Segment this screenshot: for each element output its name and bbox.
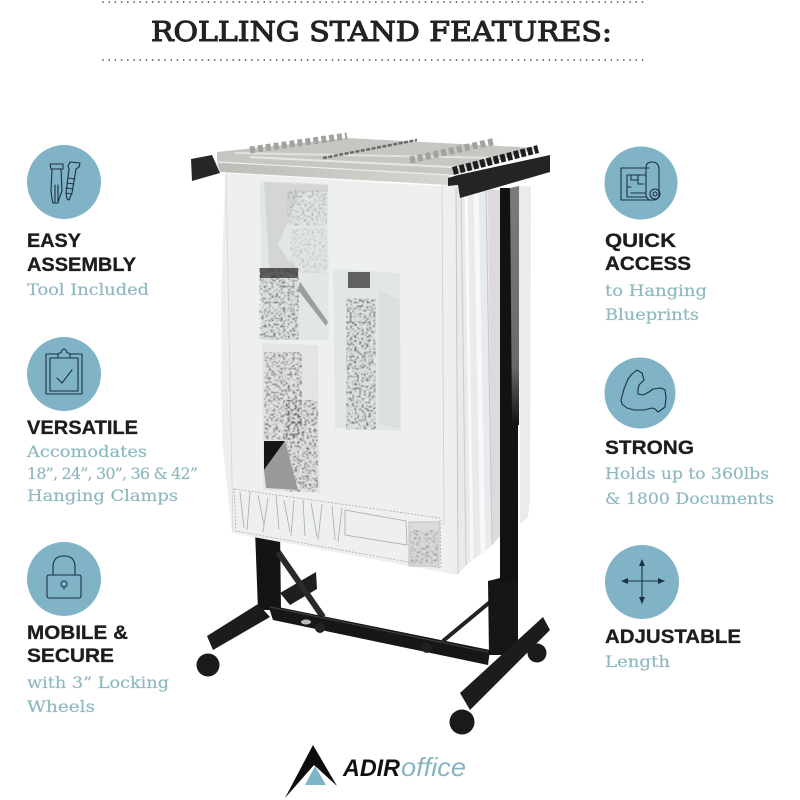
description: 18”, 24”, 30”, 36 & 42” [27,464,198,483]
blueprint drawing 3 [262,343,320,493]
logo: ADIRoffice [285,745,466,798]
back sheets and pole [442,185,531,582]
description [26,443,198,505]
heading: ACCESS [605,253,691,275]
stand base [196,530,550,734]
heading: SECURE [27,645,114,667]
heading: VERSATILE [27,417,138,439]
description: to Hanging [605,282,707,300]
blueprint drawing 2 [333,269,401,431]
icon: blueprint roll [604,146,678,220]
feature: mobile and secure [27,542,169,716]
icon: four-way arrows [605,545,679,619]
feature: quick access [604,146,707,324]
title: ROLLING STAND FEATURES: [151,16,612,48]
description: Hanging Clamps [27,487,178,505]
heading [27,622,128,667]
description [605,465,774,508]
description: & 1800 Documents [605,490,774,508]
product photo: rolling blueprint stand [191,136,550,734]
feature: easy assembly [27,145,149,299]
logo: ADIRoffice: office [401,752,466,782]
description: Holds up to 360lbs [605,465,769,483]
description: Length [605,653,670,671]
heading: EASY [27,230,81,252]
description: Tool Included [27,281,149,299]
logo mark [285,745,337,798]
blueprint title block [234,489,441,568]
description: Accomodates [26,443,147,461]
heading: ASSEMBLY [27,254,136,276]
heading: MOBILE & [27,622,128,644]
heading [605,230,691,275]
description: with 3” Locking [27,674,169,692]
top rack with clamps [191,136,550,198]
heading: ADJUSTABLE [605,626,741,648]
logo wordmark: ADIR [342,755,401,782]
heading: QUICK [605,230,676,252]
blueprint drawing 1 [259,181,329,340]
icon: screw and wall anchor [27,145,101,219]
description: Wheels [27,698,95,716]
main hanging blueprint sheet [221,173,458,575]
feature: strong [604,358,774,508]
description: Blueprints [605,306,699,324]
icon: padlock [27,542,101,616]
icon: clipboard with check [27,337,101,411]
description [27,674,169,716]
description [605,282,707,324]
feature: adjustable [605,545,741,671]
icon: flexed arm [604,358,676,428]
heading: STRONG [605,437,694,459]
feature: versatile [26,337,198,505]
heading [27,230,136,276]
